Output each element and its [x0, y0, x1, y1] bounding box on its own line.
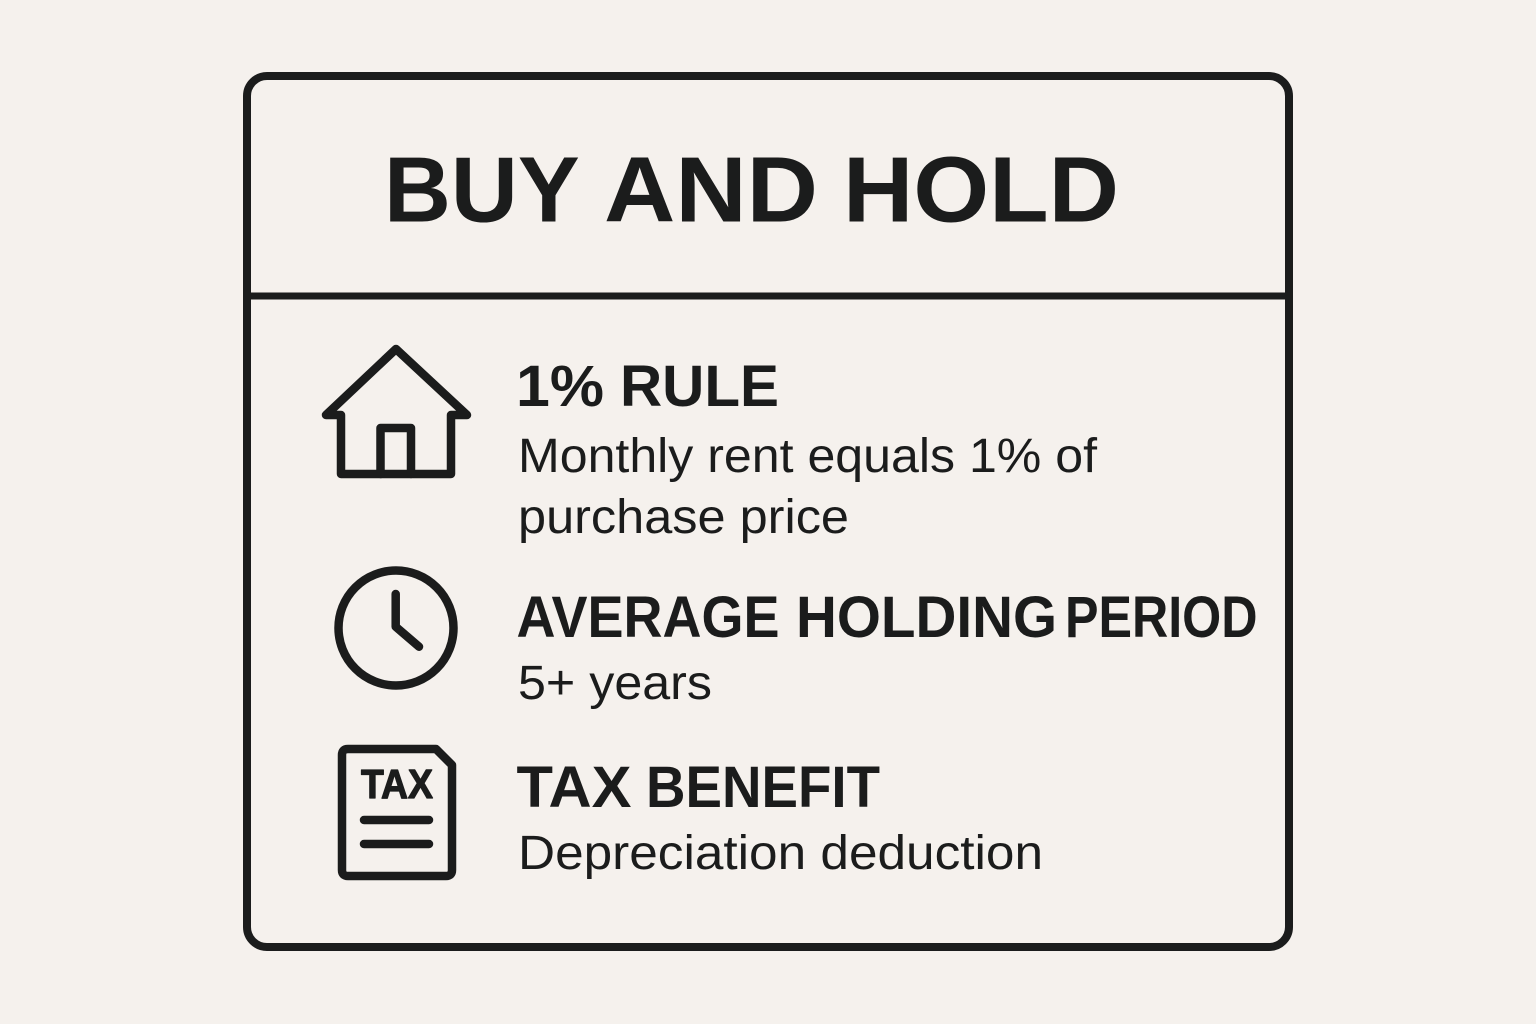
heading: tax benefit: TAX: [516, 755, 632, 820]
icon: house: [326, 349, 467, 474]
row: tax benefit: [342, 749, 1043, 880]
description: holding period: 5+ years: [518, 657, 712, 710]
row: 1% rule: [326, 349, 1098, 544]
panel: buy and hold card: [247, 76, 1289, 947]
heading: 1% rule: RULE: [620, 354, 779, 419]
description: 1% rule: purchase price: [518, 491, 849, 544]
row: average holding period: [338, 570, 1258, 710]
description: tax benefit: Depreciation deduction: [518, 827, 1043, 880]
icon: tax document: TAX: [361, 761, 433, 807]
heading: average holding period: PERIOD: [1065, 585, 1258, 650]
title: HOLD: [843, 138, 1119, 242]
card frame: [247, 76, 1289, 947]
icon: clock: [338, 570, 454, 686]
title: BUY: [384, 138, 579, 242]
heading: 1% rule: 1%: [516, 354, 604, 419]
title: AND: [604, 138, 818, 242]
description: 1% rule: Monthly rent equals 1% of: [518, 430, 1098, 483]
heading: average holding period: AVERAGE: [516, 585, 780, 650]
description: 1% rule: [518, 430, 1098, 544]
icon: tax document: [342, 749, 452, 876]
heading: tax benefit: BENEFIT: [646, 755, 880, 820]
heading: average holding period: HOLDING: [796, 585, 1057, 650]
